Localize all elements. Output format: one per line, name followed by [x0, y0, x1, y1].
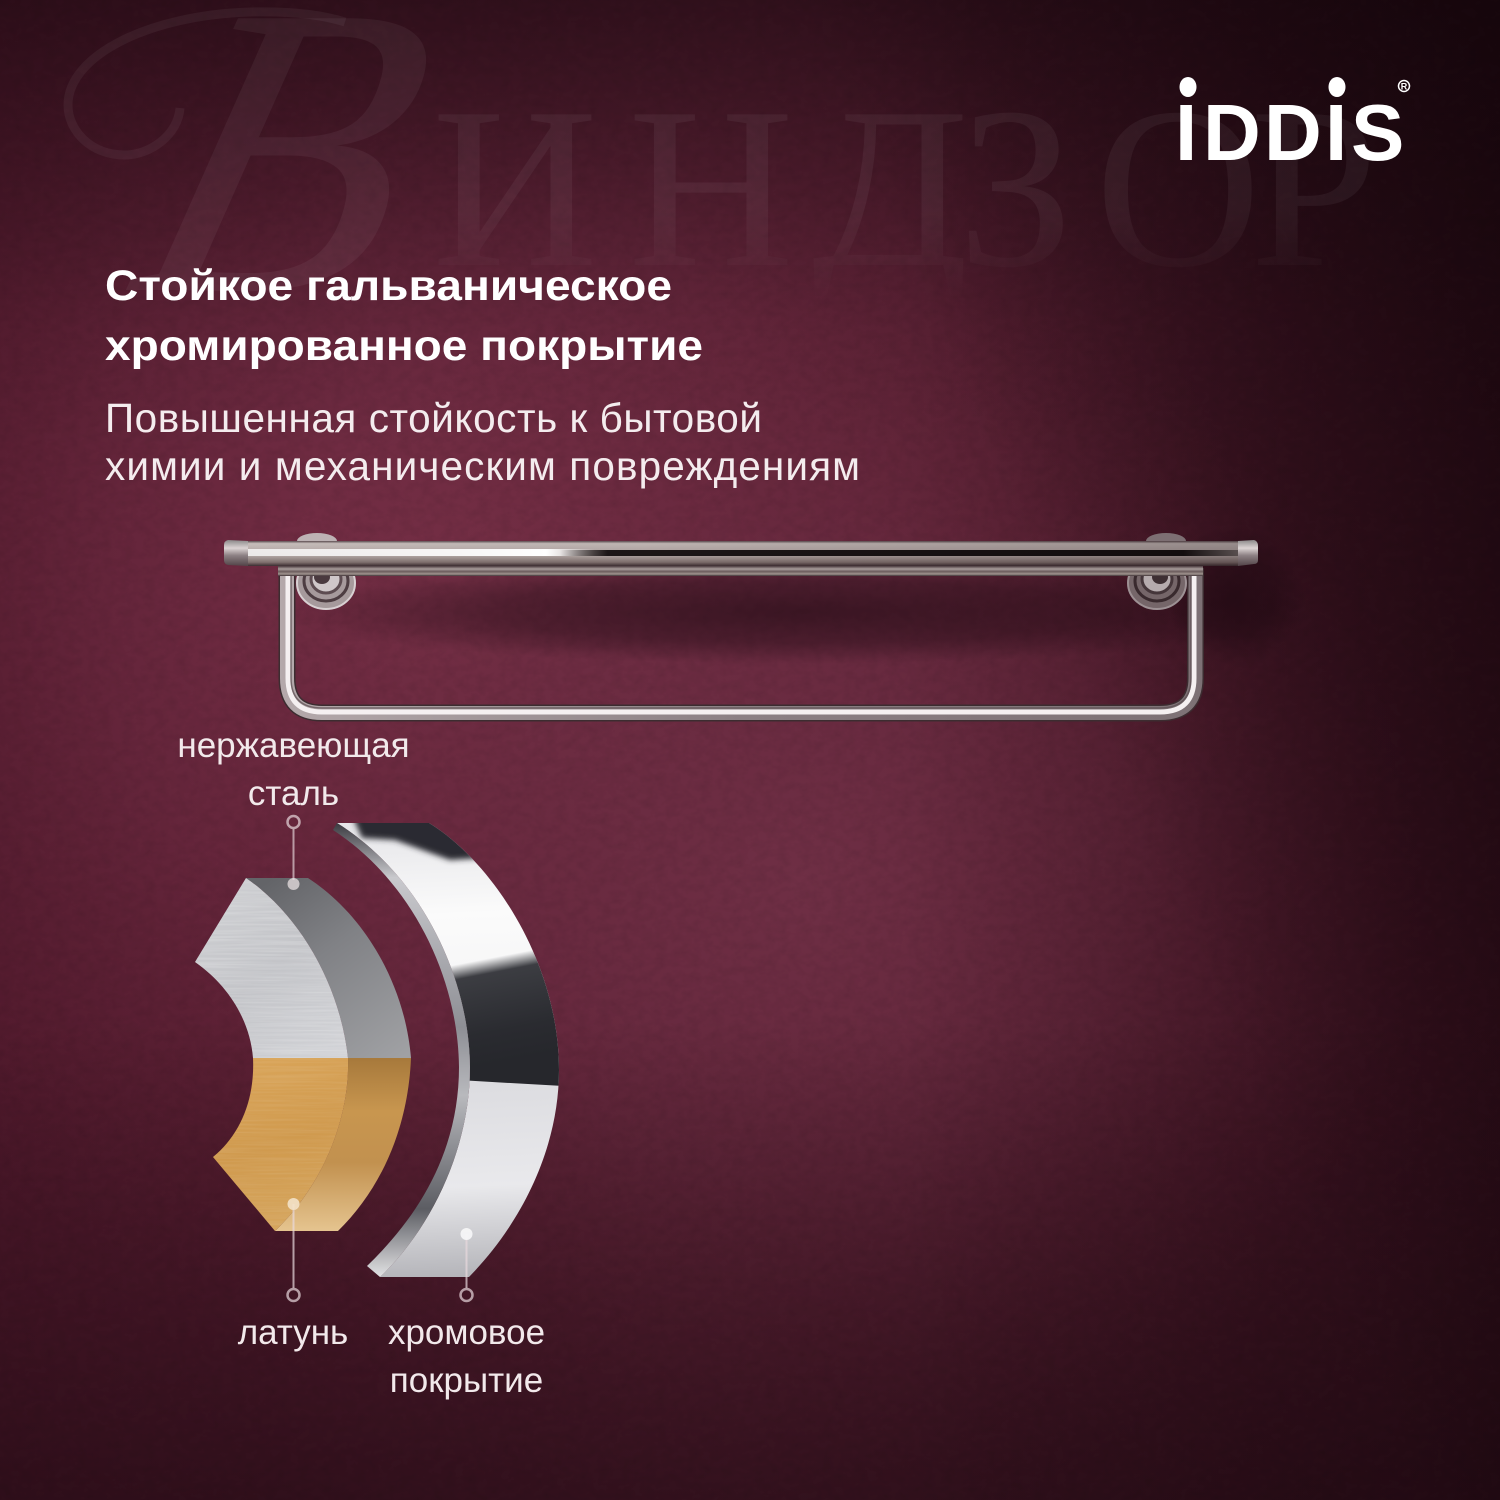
steel face: [195, 878, 348, 1058]
label: chrome coating: [388, 1313, 545, 1400]
diagram: chrome layer: [333, 823, 559, 1277]
end cap left: [224, 540, 248, 566]
main tube: [246, 541, 1238, 566]
label: chrome coating: хромовое: [388, 1313, 545, 1352]
subheading: Повышенная стойкость к бытовой: [105, 395, 762, 441]
label: stainless steel: нержавеющая: [177, 726, 410, 765]
label: chrome coating: покрытие: [390, 1361, 543, 1400]
diagram: steel and brass layers: [190, 875, 411, 1233]
wall mount left: [297, 533, 355, 609]
callout: stainless steel: [288, 816, 300, 890]
heading: хромированное покрытие: [105, 322, 703, 370]
brass face: [213, 1058, 348, 1231]
callout: brass: [288, 1198, 300, 1301]
brass brushing: [214, 1058, 348, 1225]
heading: [105, 262, 703, 370]
chrome face: [337, 823, 559, 1277]
watermark: collection name: [68, 0, 1378, 380]
chrome edge: [333, 823, 470, 1277]
upper back tube: [278, 566, 1203, 576]
heading: Стойкое гальваническое: [105, 262, 672, 310]
wall mount right: [1128, 533, 1186, 609]
subheading: [105, 395, 860, 489]
towel rail shadow: [280, 525, 1320, 665]
brass side: [275, 1058, 411, 1231]
label: stainless steel: сталь: [248, 774, 339, 813]
towel bar: [287, 568, 1196, 713]
steel side: [246, 878, 411, 1058]
chrome dark reflection: [451, 950, 559, 1086]
label: stainless steel: [177, 726, 410, 813]
callout: chrome: [460, 1228, 472, 1301]
end cap right: [1238, 540, 1258, 566]
steel brushing: [196, 882, 346, 1052]
logo: IDDIS: IDDIS: [1175, 88, 1404, 177]
subheading: химии и механическим повреждениям: [105, 443, 860, 489]
watermark: collection name: ИНДЗОР: [432, 60, 1378, 315]
chrome top reflection: [352, 815, 482, 860]
logo: IDDIS: R: [1401, 82, 1408, 92]
label: brass: латунь: [238, 1313, 348, 1352]
towel rail: [224, 533, 1258, 713]
